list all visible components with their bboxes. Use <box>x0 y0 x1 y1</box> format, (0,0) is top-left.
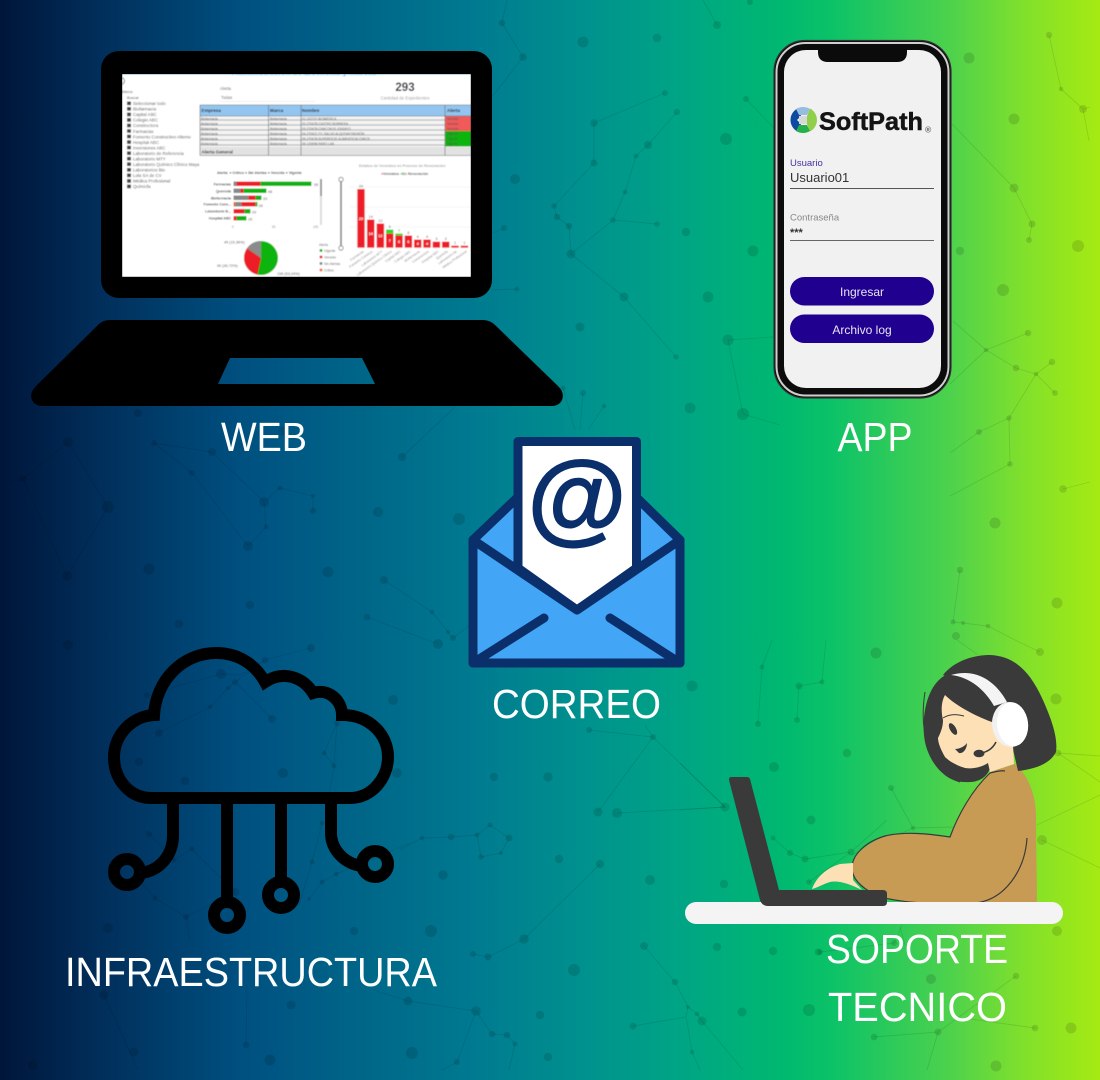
dashboard: pie legend: Alerta <box>319 243 328 247</box>
dashboard: company list: Hospital ABC <box>133 140 159 145</box>
dashboard: table: Nombre <box>302 108 320 113</box>
label: SOPORTE TECNICO <box>826 926 1008 1030</box>
panel: mobile app phone <box>774 40 951 398</box>
label: WEB: WEB <box>221 414 307 460</box>
dashboard: company list: Fomento Constructivo Alterno <box>133 134 191 139</box>
dashboard: table: 06-120658-PARO LAB <box>302 142 334 146</box>
dashboard: vertical bar chart: 7 <box>389 239 391 243</box>
dashboard: pie chart: 90 (30,72%) <box>217 264 238 268</box>
dashboard: vertical bar chart: Quimicfa <box>435 249 449 260</box>
dashboard: filter: Alerta <box>220 86 232 91</box>
dashboard: horizontal bar chart: Laboratorio B... <box>205 210 231 214</box>
dashboard: pie chart: 156 (53,24%) <box>277 272 301 276</box>
dashboard: horizontal bar chart <box>204 171 322 229</box>
dashboard: vertical bar chart: 7 <box>398 229 400 233</box>
dashboard: table: 05-270478-SUPERFICIE ALIMENTICIA CHECK <box>302 137 371 141</box>
dashboard: vertical bar chart: Colegio ABC <box>394 249 412 264</box>
dashboard: horizontal bar chart: 20 <box>252 210 256 214</box>
dashboard: vertical bar chart: 4 <box>417 235 419 239</box>
dashboard: vertical bar chart: Laboratorio MTY <box>361 249 384 267</box>
login: password field: *** <box>790 227 804 239</box>
microphone <box>979 742 996 754</box>
dashboard: vertical bar chart: ●Vencidos ●En Renovación <box>381 172 428 176</box>
button: Archivo log <box>790 314 934 343</box>
dashboard: company list: Médica Profesional <box>133 179 170 184</box>
dashboard: pie legend <box>319 243 341 272</box>
dashboard: table: Marca <box>270 108 284 113</box>
dashboard: company list: Químicfa <box>133 184 151 189</box>
label: INFRAESTRUCTURA: INFRAESTRUCTURA <box>65 949 438 995</box>
headband <box>951 673 1007 706</box>
dashboard: horizontal bar chart: 100 <box>313 225 319 229</box>
dashboard: table: Biofarmacia <box>270 127 287 131</box>
dashboard: table: Alerta General <box>202 150 233 154</box>
dashboard: vertical bar chart: 1 <box>463 241 465 245</box>
login: user field: Usuario01 <box>790 170 849 185</box>
label: SOPORTE TECNICO: SOPORTE <box>826 926 1008 972</box>
earcup <box>990 700 1030 749</box>
logo: SoftPath: ® <box>925 124 932 134</box>
dashboard: table: 03-270478-CHACON EL ENSAYO <box>302 127 351 131</box>
icon: email envelope <box>473 440 680 663</box>
label: SOPORTE TECNICO: TECNICO <box>828 984 1007 1030</box>
dashboard: table: 04-270421-TV. SALUD ALQUTAR PADRÓN <box>302 131 365 136</box>
hair back <box>943 655 1056 771</box>
dashboard: vertical bar chart: 9 <box>389 225 391 229</box>
dashboard: horizontal bar chart: Alerta: ● Crítico ● Sin Alertas ● Vencido ● Vigente <box>217 171 302 175</box>
eye <box>943 715 964 736</box>
dashboard: company list: Constructora <box>133 123 159 128</box>
hand <box>812 863 862 890</box>
dashboard: vertical bar chart: Laboratorio de <box>437 249 458 265</box>
dashboard: horizontal bar chart: Biofarmacia <box>211 196 231 200</box>
dashboard: horizontal bar chart: Hospital ABC <box>209 216 231 220</box>
dashboard: vertical bar chart: Médica Profesional <box>442 249 468 269</box>
dashboard: vertical bar chart: Laboratorio Químico Clínico <box>356 249 393 277</box>
dashboard: horizontal bar chart: 48 <box>268 190 272 194</box>
dashboard: horizontal bar chart: 28 <box>258 204 263 208</box>
dashboard: vertical bar chart: Biofarmacia <box>404 249 421 263</box>
hair front <box>924 674 1012 782</box>
dashboard: table: Vigente <box>447 142 458 146</box>
dashboard: company list: Marca <box>122 90 133 94</box>
dashboard: vertical bar chart: 6 <box>407 231 409 235</box>
dashboard: vertical bar chart: 1 <box>454 241 456 245</box>
button: Archivo log: Archivo log <box>832 323 892 337</box>
dashboard: horizontal bar chart: 50 <box>272 225 276 229</box>
dashboard: horizontal bar chart: 95 <box>314 183 318 187</box>
dashboard: company list: Laboratorio Químico Clínico Maya <box>133 162 200 167</box>
dashboard: table: Biofarmacia <box>270 117 287 121</box>
dashboard: horizontal bar chart: 33 <box>263 197 267 201</box>
dashboard: vertical bar chart: Constructora <box>411 249 430 264</box>
login: password field <box>790 212 934 241</box>
dashboard: table: 02-270478-CASTRO BORRERA <box>302 122 349 126</box>
dashboard: KPI: 293 <box>395 82 415 94</box>
dashboard: table: Vencido <box>447 127 459 131</box>
dashboard: vertical bar chart: 6 <box>407 240 409 244</box>
dashboard: table: Biofarmacia <box>201 127 218 131</box>
dashboard: table: Biofarmacia <box>201 142 218 146</box>
dashboard: vertical bar chart: Farmacias <box>349 249 365 262</box>
dashboard: horizontal bar chart: 0 <box>232 225 234 229</box>
dashboard: horizontal bar chart: Fomento Cons... <box>204 202 231 206</box>
dashboard: company list: Capital ABC <box>133 112 157 117</box>
laptop <box>729 777 887 906</box>
login: user field: Usuario <box>790 158 823 169</box>
dashboard: company list: Colegio ABC <box>133 118 158 123</box>
dashboard: vertical bar chart: 14 <box>369 232 374 236</box>
dashboard: vertical bar chart: 4 <box>417 242 420 246</box>
logo: SoftPath: SoftPath <box>819 108 923 136</box>
dashboard: company list: Laboratorios Bio <box>133 168 166 173</box>
dashboard: table: Biofarmacia <box>201 117 218 121</box>
dashboard screenshot <box>118 68 471 277</box>
phone notch <box>818 49 907 62</box>
dashboard: vertical bar chart: Hospital ABC <box>421 249 440 264</box>
hair outline <box>923 692 960 782</box>
dashboard: table: Biofarmacia <box>201 132 218 136</box>
dashboard: vertical bar chart: 3 <box>435 237 437 241</box>
button: Ingresar: Ingresar <box>840 285 884 299</box>
dashboard: pie chart <box>217 240 301 276</box>
dashboard: table: Vigente <box>447 137 458 141</box>
dashboard: KPI <box>380 82 430 100</box>
dashboard: company list <box>122 90 200 189</box>
icon: cloud infrastructure <box>114 653 388 928</box>
dashboard: company list: Laboratorio de Referencia <box>133 151 184 156</box>
login: password field: Contraseña <box>790 212 840 224</box>
dashboard: pie legend: Crítico <box>324 268 334 272</box>
dashboard: table: Biofarmacia <box>201 122 218 126</box>
dashboard: company list: Lola SA de CV <box>133 173 162 178</box>
dashboard: table: Empresa <box>202 108 221 113</box>
icon: laptop base <box>31 320 563 406</box>
dashboard: horizontal bar chart: 16 <box>248 218 252 222</box>
dashboard: company list: Farmacias <box>133 129 154 134</box>
dashboard: table: Biofarmacia <box>201 137 218 141</box>
dashboard: table: Biofarmacia <box>270 122 287 126</box>
desk <box>685 902 1063 924</box>
dashboard: horizontal bar chart: Farmacias <box>214 182 231 186</box>
label: APP: APP <box>838 414 912 460</box>
face and neck <box>938 695 1014 772</box>
dashboard: company list: Biofarmacia <box>133 107 157 112</box>
dashboard: table: Vencido <box>447 117 459 121</box>
button: Ingresar <box>790 277 934 306</box>
dashboard: filter <box>220 86 315 102</box>
dashboard: table: Biofarmacia <box>270 137 287 141</box>
dashboard: company list: Buscar <box>127 96 140 100</box>
phone screen <box>784 50 941 388</box>
dashboard: table: 01-102707-BIOMEDICA <box>302 117 337 121</box>
phone body <box>774 40 951 398</box>
dashboard: table <box>200 105 471 156</box>
dashboard: pie chart: 45 (15,36%) <box>224 240 245 244</box>
body and arm <box>852 764 1037 904</box>
dashboard: pie legend: Vigente <box>324 249 336 253</box>
label: CORREO: CORREO <box>492 681 661 727</box>
dashboard: table: Biofarmacia <box>270 132 287 136</box>
dashboard: table: Alerta <box>447 108 460 113</box>
login: user field <box>790 158 934 189</box>
dashboard: filter: Todas <box>221 95 232 100</box>
dashboard: vertical bar chart: 4 <box>426 235 428 239</box>
dashboard: horizontal bar chart: Quimiofa <box>216 190 231 194</box>
dashboard: vertical bar chart: 6 <box>398 240 400 244</box>
dashboard: company list: Inversiones ABC <box>133 145 165 150</box>
dashboard screenshot: Administración de Licencias y Marcas <box>232 68 377 77</box>
dashboard: table: Vencido <box>447 122 459 126</box>
dashboard: vertical bar chart: Capital ABC <box>384 249 402 263</box>
panel: technical support illustration <box>685 655 1063 924</box>
dashboard: vertical bar chart: 29 <box>359 217 363 221</box>
panel: web laptop <box>31 51 563 406</box>
dashboard: company list: Seleccionar todo <box>133 101 166 106</box>
icon: email envelope: @ <box>527 440 627 554</box>
dashboard: table: Vigente <box>447 132 458 136</box>
arm outline <box>852 771 1027 904</box>
dashboard: company list: Laboratorio MTY <box>133 156 166 162</box>
dashboard: vertical bar chart: Fomento Construc <box>348 249 374 269</box>
dashboard: vertical bar chart: 3 <box>445 237 447 241</box>
dashboard: pie legend: Vencido <box>324 256 336 260</box>
icon: laptop screen frame <box>101 51 492 298</box>
dashboard: vertical bar chart: 29 <box>359 184 363 188</box>
dashboard: vertical bar chart: 12 <box>378 234 383 238</box>
dashboard: KPI: Cantidad de Expedientes <box>380 96 430 100</box>
dashboard: pie legend: Sin Alertas <box>324 262 341 266</box>
dashboard: vertical bar chart: 12 <box>378 219 383 223</box>
smile <box>955 743 967 753</box>
dashboard: vertical bar chart: 4 <box>426 242 429 246</box>
dashboard: table: Biofarmacia <box>270 142 287 146</box>
dashboard: vertical bar chart: Estatus de Vencidos en Proceso de Renovación <box>359 164 446 168</box>
dashboard: vertical bar chart: 14 <box>369 215 373 219</box>
dashboard: vertical bar chart <box>339 164 471 277</box>
